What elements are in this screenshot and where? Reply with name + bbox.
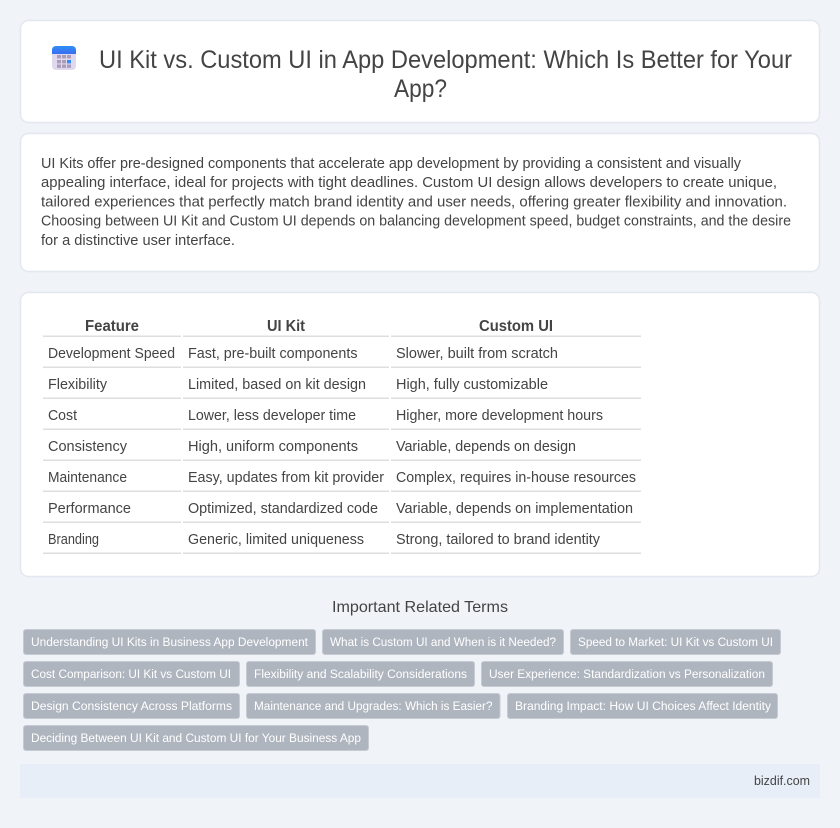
- tag: branding impact: [508, 694, 778, 718]
- row: branding: [43, 532, 641, 554]
- row: consistency: Consistency: [48, 439, 128, 455]
- table header row: Custom UI: [479, 318, 553, 335]
- text block: intro paragraph: appealing interface, ideal for projects with tight deadlines. Custom UI design allows developers to create unique,: [41, 175, 777, 191]
- row: cost: Cost: [48, 408, 77, 424]
- row: maintenance: Easy, updates from kit provider: [188, 470, 384, 486]
- title: App?: [394, 75, 447, 103]
- tag: cost comparison: [24, 662, 240, 686]
- row: branding: Branding: [48, 532, 99, 548]
- row: maintenance: Complex, requires in-house resources: [396, 470, 636, 486]
- tag: design consistency: [24, 694, 240, 718]
- tag: deciding between: Deciding Between UI Kit and Custom UI for Your Business App: [31, 731, 361, 745]
- tag: flexibility and scalability: [246, 662, 474, 686]
- tag: user experience: User Experience: Standardization vs Personalization: [489, 667, 765, 681]
- row: cost: Lower, less developer time: [188, 408, 356, 424]
- text block: intro paragraph: Choosing between UI Kit and Custom UI depends on balancing development speed, budget constraints, and the desire: [41, 214, 791, 230]
- row: flexibility: High, fully customizable: [396, 377, 548, 393]
- row: development speed: Development Speed: [48, 346, 175, 362]
- tag: flexibility and scalability: Flexibility and Scalability Considerations: [254, 667, 467, 681]
- row: branding: Generic, limited uniqueness: [188, 532, 364, 548]
- row: performance: Performance: [48, 501, 131, 517]
- tag list: related terms: [24, 630, 780, 750]
- panel: title card: [20, 20, 820, 122]
- tag: design consistency: Design Consistency Across Platforms: [31, 699, 232, 713]
- table header row: Feature: [85, 318, 139, 335]
- footer: [20, 764, 820, 798]
- tag: branding impact: Branding Impact: How UI Choices Affect Identity: [515, 699, 772, 713]
- row: performance: Optimized, standardized code: [188, 501, 378, 517]
- table header row: UI Kit: [267, 318, 306, 335]
- text block: intro paragraph: tailored experiences that perfectly match brand identity and user needs, offering greater flexibility and innovation.: [41, 194, 787, 210]
- tag: maintenance and upgrades: [246, 694, 500, 718]
- tag: speed to market: Speed to Market: UI Kit vs Custom UI: [578, 635, 773, 649]
- row: flexibility: [43, 377, 641, 399]
- text block: intro paragraph: UI Kits offer pre-designed components that accelerate app development by providing a consistent and visually: [41, 156, 742, 172]
- panel: intro paragraph card: [20, 134, 820, 272]
- tag: what is custom ui: [322, 630, 564, 654]
- text block: intro paragraph: [41, 156, 791, 249]
- tag: understanding ui kits: Understanding UI Kits in Business App Development: [31, 635, 309, 649]
- heading: important related terms: Important Related Terms: [332, 599, 508, 616]
- row: flexibility: Flexibility: [48, 377, 108, 393]
- row: consistency: High, uniform components: [188, 439, 358, 455]
- row: development speed: Fast, pre-built components: [188, 346, 358, 362]
- title: [99, 46, 792, 103]
- table header row: [43, 318, 641, 337]
- panel: comparison table card: [20, 292, 820, 576]
- tag: speed to market: [570, 630, 780, 654]
- table: comparison: [43, 318, 641, 554]
- title: UI Kit vs. Custom UI in App Development: Which Is Better for Your: [99, 46, 792, 74]
- row: development speed: [43, 346, 641, 368]
- row: maintenance: [43, 470, 641, 492]
- tag: what is custom ui: What is Custom UI and When is it Needed?: [330, 635, 556, 649]
- tag: deciding between: [24, 726, 368, 750]
- row: branding: Strong, tailored to brand identity: [396, 532, 601, 548]
- row: cost: Higher, more development hours: [396, 408, 603, 424]
- row: performance: Variable, depends on implementation: [396, 501, 633, 517]
- icon: calendar: [52, 46, 76, 70]
- row: performance: [43, 501, 641, 523]
- text block: intro paragraph: for a distinctive user interface.: [41, 233, 235, 249]
- row: development speed: Slower, built from scratch: [396, 346, 558, 362]
- row: maintenance: Maintenance: [48, 470, 127, 486]
- row: cost: [43, 408, 641, 430]
- tag: user experience: [482, 662, 772, 686]
- tag: cost comparison: Cost Comparison: UI Kit vs Custom UI: [31, 667, 231, 681]
- row: consistency: Variable, depends on design: [396, 439, 576, 455]
- tag: maintenance and upgrades: Maintenance and Upgrades: Which is Easier?: [254, 699, 493, 713]
- row: consistency: [43, 439, 641, 461]
- tag: understanding ui kits: [24, 630, 316, 654]
- footer: bizdif.com: [754, 773, 810, 788]
- row: flexibility: Limited, based on kit design: [188, 377, 366, 393]
